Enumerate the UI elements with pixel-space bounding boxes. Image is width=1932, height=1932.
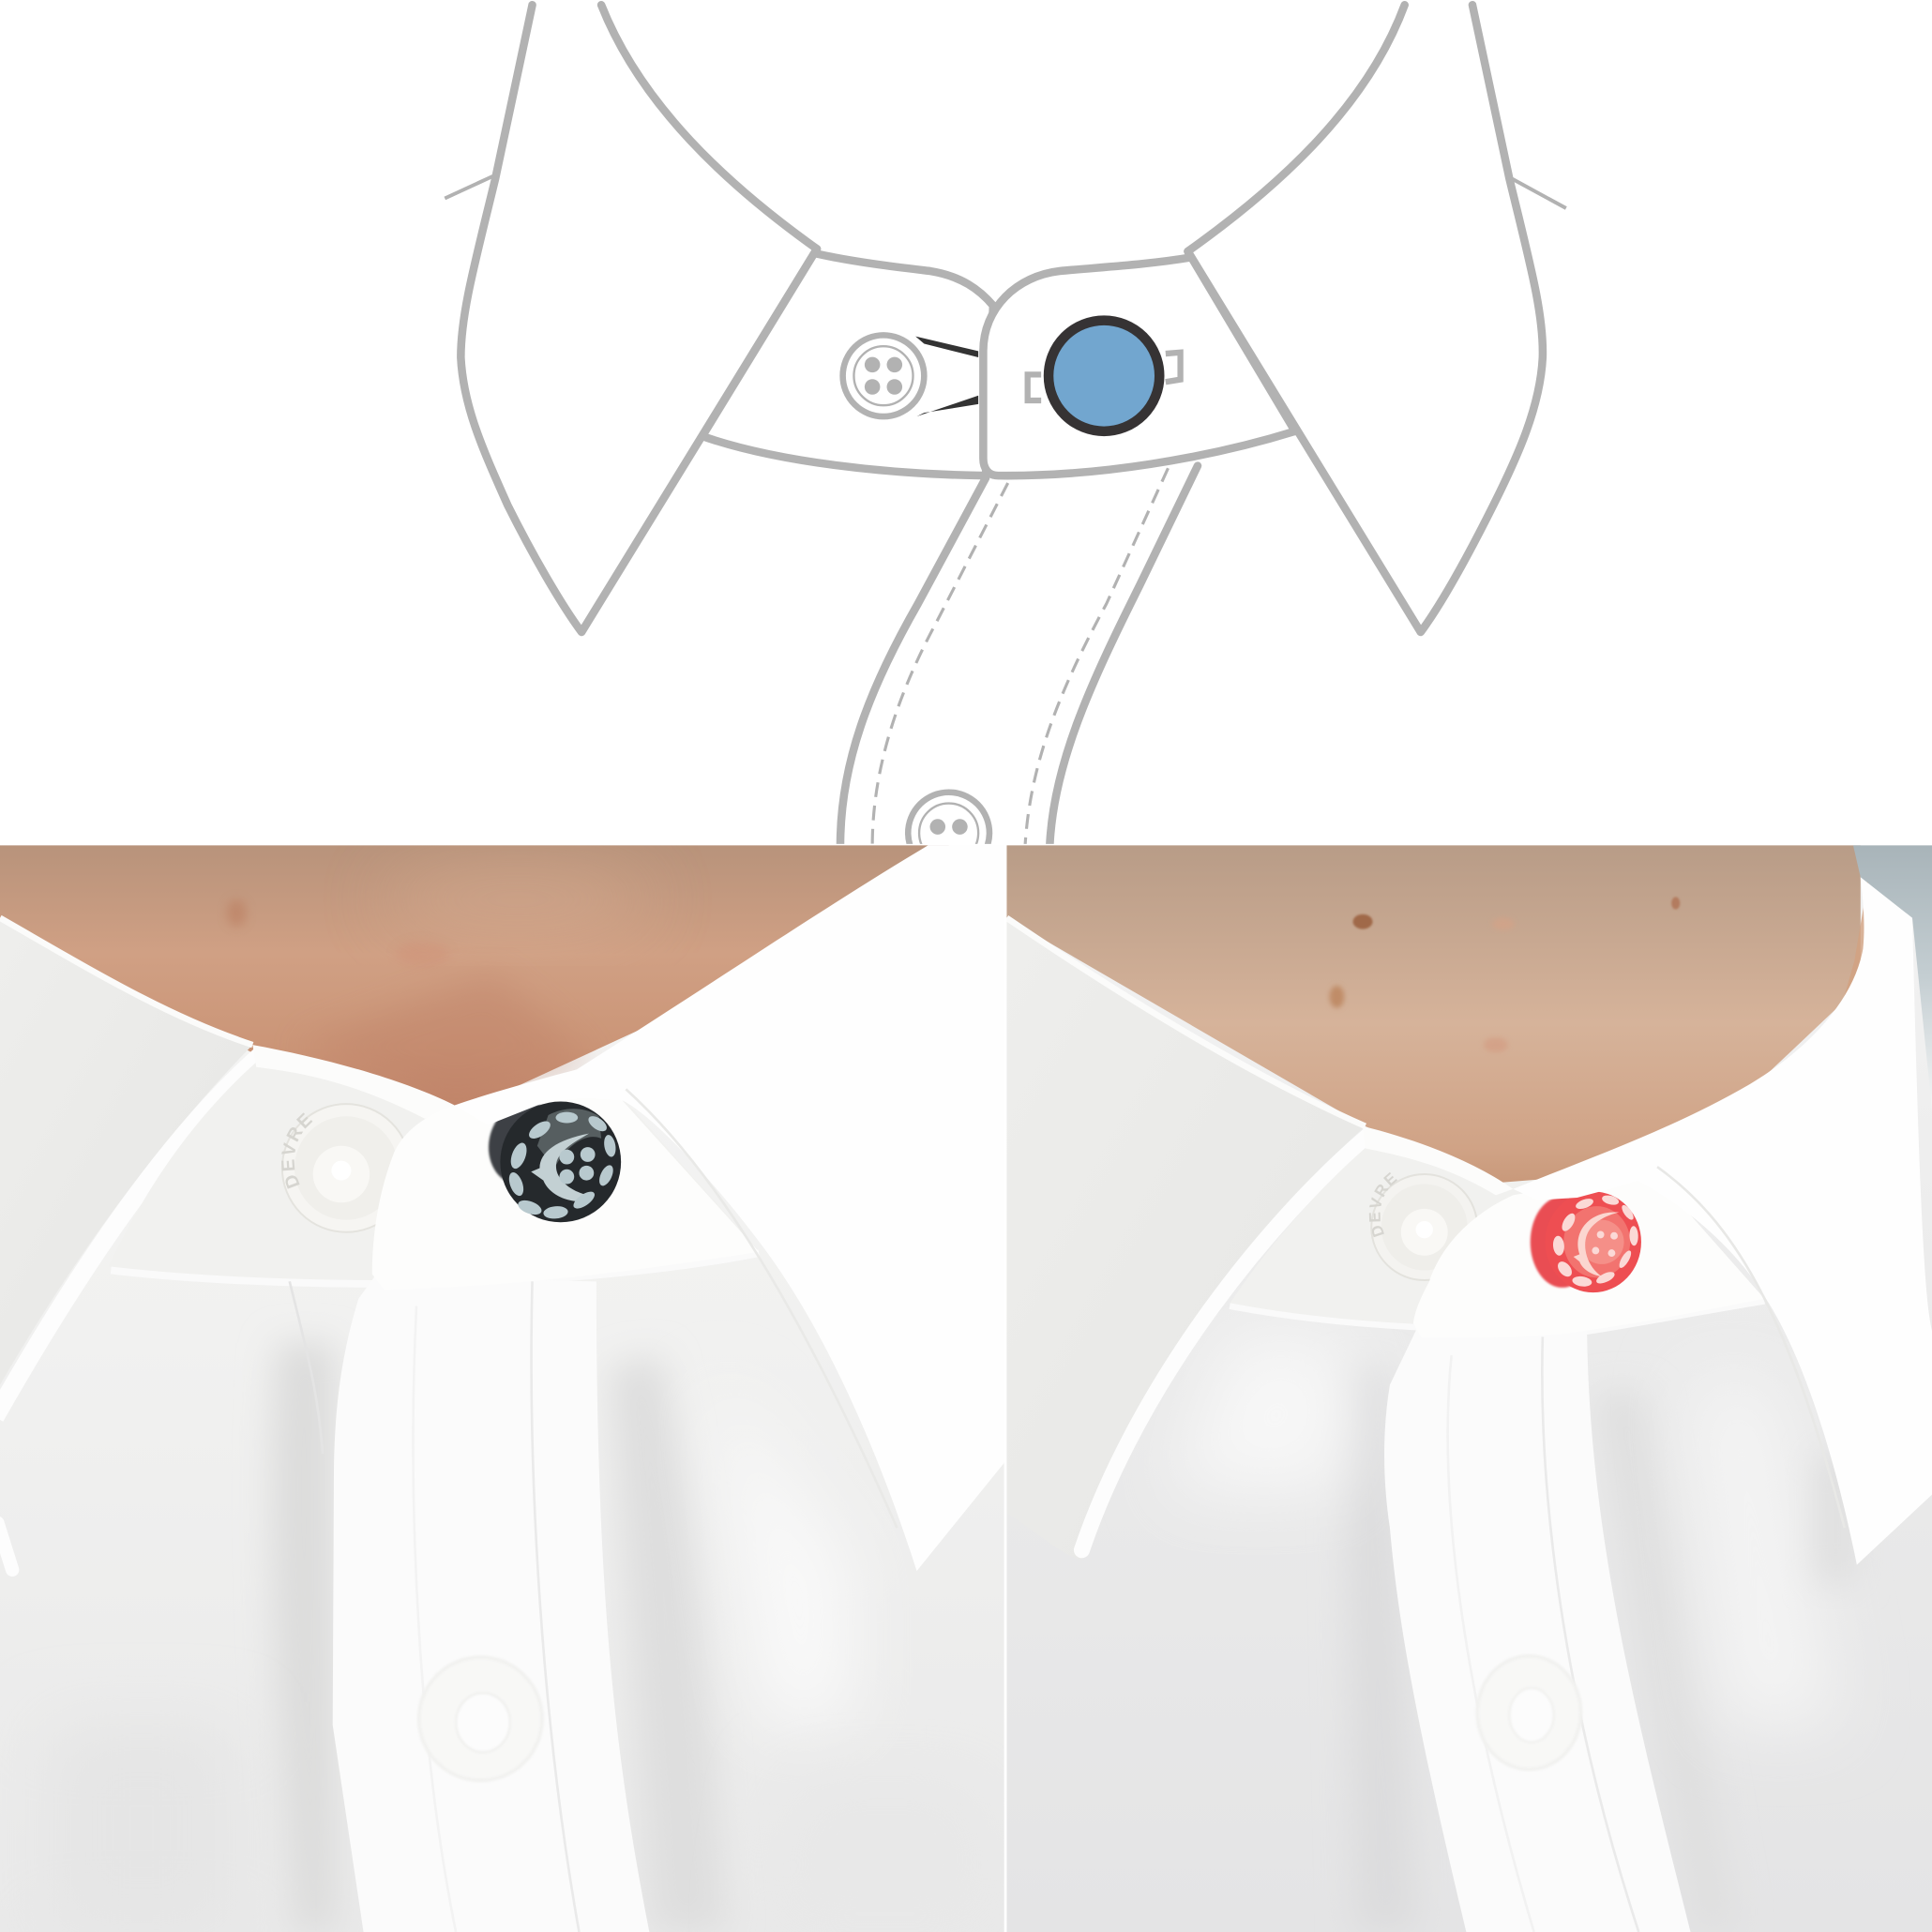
right neckband <box>983 258 1295 475</box>
icon: red patterned button <box>1531 1191 1641 1292</box>
panel: photo with black button <box>0 845 1004 1932</box>
white button left: DEVRE <box>281 1112 313 1189</box>
shirt body <box>0 1032 1004 1932</box>
right collar leaf <box>1187 5 1566 632</box>
skin <box>0 845 949 1115</box>
shirt folds and shading <box>50 1343 1004 1932</box>
white button left <box>1369 1172 1477 1281</box>
lower white button <box>419 1657 542 1780</box>
placket below collar <box>840 466 1198 845</box>
icon: black patterned button <box>487 1101 621 1223</box>
shirt folds and shading <box>1170 1331 1854 1932</box>
neckband <box>109 1045 759 1284</box>
white button left <box>281 1103 403 1232</box>
lower white button <box>1477 1656 1581 1770</box>
collar leaf inner edges <box>702 249 1295 436</box>
left collar leaf <box>1006 918 1367 1560</box>
skin blemishes and warm shading <box>226 900 592 1085</box>
white button left: DEVRE <box>1369 1172 1397 1238</box>
placket <box>290 1276 649 1932</box>
collar stand <box>372 1097 757 1279</box>
left collar leaf <box>445 5 817 632</box>
right collar leaf <box>455 844 1005 1571</box>
neckband <box>1230 1126 1764 1335</box>
background corner <box>1853 845 1932 1073</box>
icon: small white button with thread <box>843 335 978 416</box>
shirt body <box>1006 845 1932 1932</box>
icon: blue collar button <box>1028 321 1181 431</box>
panel: photo with red button <box>1006 845 1932 1932</box>
icon: lower placket button <box>905 790 992 844</box>
collar stand <box>1413 1170 1764 1338</box>
panel: collar line diagram <box>445 5 1566 873</box>
skin moles <box>1330 881 1876 1052</box>
left neckband <box>702 254 993 475</box>
left collar leaf <box>0 918 262 1570</box>
skin <box>1006 845 1861 1201</box>
right collar leaf <box>1513 877 1932 1564</box>
placket <box>1384 1328 1690 1932</box>
